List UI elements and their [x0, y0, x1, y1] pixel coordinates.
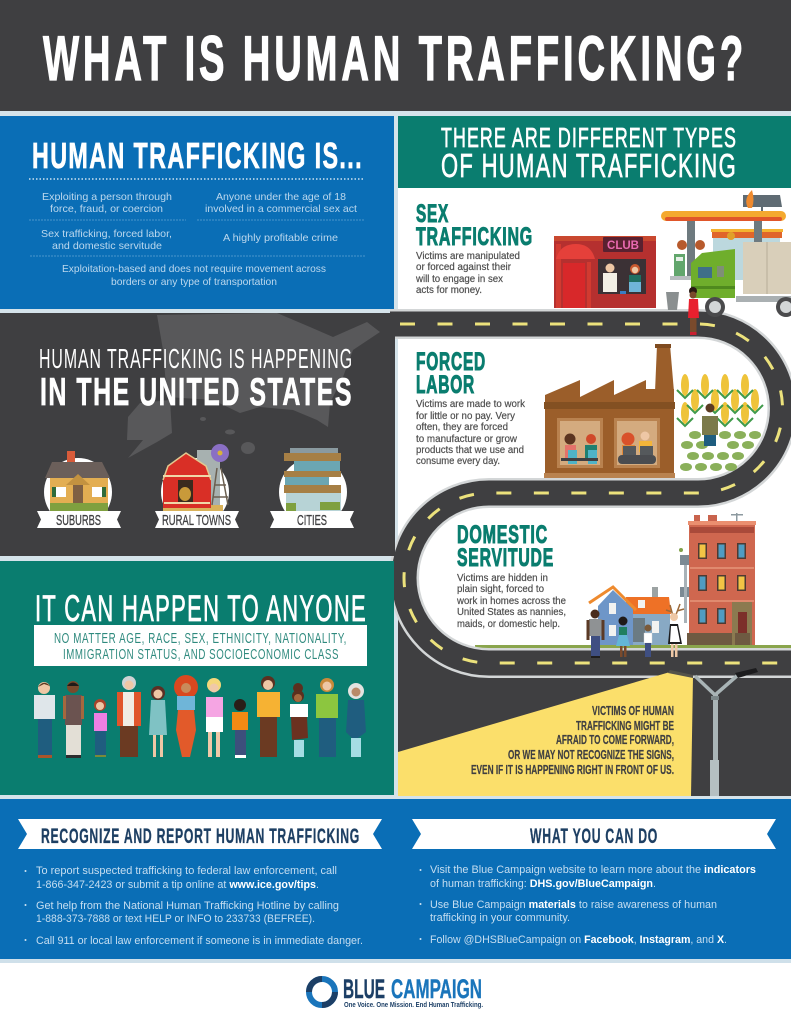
person 10: [290, 683, 308, 757]
workers at sewing tables: [561, 434, 598, 464]
list: report steps: [24, 865, 363, 947]
callout: yellow light beam: TRAFFICKING MIGHT BE: [576, 719, 674, 733]
section: sex trafficking text: acts for money.: [416, 285, 482, 296]
icon: blue house: [589, 587, 671, 645]
label: rural towns: RURAL TOWNS: [162, 512, 231, 529]
section: domestic servitude text: Victims are hidden in: [457, 573, 548, 584]
label: rural towns: [155, 511, 239, 529]
icon: rural barn: [161, 444, 229, 526]
label: cities: [270, 511, 354, 529]
section: forced labor text: consume every day.: [416, 456, 500, 467]
heading: HUMAN TRAFFICKING IS HAPPENING: [39, 343, 353, 374]
icon: street lamp: [695, 668, 758, 796]
subheading box: [34, 625, 367, 666]
person 8: [232, 699, 248, 758]
title band: [0, 0, 791, 111]
person 9: [257, 676, 280, 757]
person 4: [117, 676, 141, 757]
section: domestic servitude text: United States as nannies,: [457, 607, 566, 618]
icon: suburbs house: [44, 451, 112, 526]
person 1: [34, 682, 55, 758]
list: what you can do: of human trafficking: DHS.gov/BlueCampaign.: [430, 878, 656, 890]
list: what you can do: Follow @DHSBlueCampaign on Facebook, Instagram, and X.: [430, 934, 727, 946]
road: [390, 324, 791, 663]
icon: trash bin: [666, 292, 679, 310]
person 3: [94, 699, 107, 757]
man in grey shirt: [586, 610, 604, 658]
section: sex trafficking text: [415, 200, 533, 296]
list: report steps: Call 911 or local law enforcement if someone is in immediate danger.: [36, 935, 363, 947]
list: report steps: 1-888-373-7888 or text HELP or INFO to 233733 (BEFREE).: [36, 913, 315, 925]
icon: logo ring: [309, 979, 335, 1005]
panel: bottom blue action band: [0, 799, 791, 963]
map silhouette: [127, 313, 380, 458]
logo: blue campaign: BLUE: [343, 974, 385, 1004]
section: forced labor text: often, they are forced: [416, 422, 508, 433]
person 5: [149, 686, 167, 757]
ribbon: recognize and report: RECOGNIZE AND REPORT HUMAN TRAFFICKING: [41, 825, 360, 848]
heading: IN THE UNITED STATES: [40, 371, 353, 414]
callout: yellow light beam: EVEN IF IT IS HAPPENING RIGHT IN FRONT OF US.: [471, 763, 674, 777]
ribbon: what you can do: [412, 819, 776, 849]
ribbon: recognize and report: [18, 819, 382, 849]
definition list: and domestic servitude: [52, 240, 162, 252]
definition list: [41, 191, 357, 288]
callout: yellow light beam: VICTIMS OF HUMAN: [592, 704, 674, 718]
icon: brick apartment building: [679, 513, 756, 645]
section: domestic servitude text: plain sight, forced to: [457, 584, 544, 595]
person 7: [206, 678, 223, 757]
panel: it can happen to anyone: [0, 561, 394, 795]
ribbon: what you can do: WHAT YOU CAN DO: [530, 825, 658, 848]
list: report steps: 1-866-347-2423 or submit a tip online at www.ice.gov/tips.: [36, 879, 319, 891]
people group: family on the road: [586, 604, 684, 658]
definition list: Anyone under the age of 18: [216, 191, 346, 203]
section: sex trafficking text: Victims are manipulated: [416, 251, 520, 262]
panel: human trafficking is: [0, 116, 394, 309]
section: domestic servitude text: SERVITUDE: [457, 544, 554, 572]
logo: blue campaign: CAMPAIGN: [391, 974, 482, 1004]
section: domestic servitude text: maids, or domestic help.: [457, 619, 560, 630]
label: suburbs: [37, 511, 121, 529]
list: what you can do: Use Blue Campaign materials to raise awareness of human: [430, 899, 717, 911]
section: forced labor text: [416, 348, 526, 467]
definition list: involved in a commercial sex act: [205, 203, 357, 215]
boy in white shirt: [644, 624, 652, 657]
panel: happening in the united states: [0, 313, 395, 556]
definition list: Exploitation-based and does not require movement across: [62, 263, 326, 275]
callout: yellow light beam: OR WE MAY NOT RECOGNIZE THE SIGNS,: [508, 748, 674, 762]
logo: blue campaign: One Voice. One Mission. End Human Trafficking.: [344, 1002, 483, 1009]
people row: [34, 675, 366, 758]
section: domestic servitude text: [456, 521, 566, 630]
heading: IT CAN HAPPEN TO ANYONE: [35, 588, 367, 629]
section: forced labor text: products that we use and: [416, 445, 524, 456]
subheading box: NO MATTER AGE, RACE, SEX, ETHNICITY, NATIONALITY,: [54, 630, 347, 647]
section: sex trafficking text: TRAFFICKING: [416, 223, 533, 251]
person 2: [63, 681, 84, 758]
section: sex trafficking text: will to engage in sex: [415, 274, 503, 285]
section: forced labor text: for little or no pay. Very: [416, 411, 515, 422]
grass strip: [475, 645, 791, 648]
icon: club building: CLUB: [607, 240, 639, 252]
heading: [39, 343, 353, 414]
icon: woman in red dress: [688, 287, 699, 335]
icon: green truck: [691, 242, 791, 317]
list: what you can do: trafficking in your community.: [430, 912, 570, 924]
list: what you can do: [420, 864, 756, 946]
definition list: Exploiting a person through: [42, 191, 172, 203]
definition list: borders or any type of transportation: [111, 276, 277, 288]
section: sex trafficking text: SEX: [416, 200, 449, 228]
definition list: force, fraud, or coercion: [50, 203, 163, 215]
section: domestic servitude text: DOMESTIC: [457, 521, 548, 549]
section: sex trafficking text: or forced against their: [416, 262, 512, 273]
panel: types of trafficking heading: [398, 116, 791, 188]
workers at conveyor: [618, 432, 656, 464]
icon: corn field and farmer: [677, 374, 763, 471]
list: report steps: Get help from the National Human Trafficking Hotline by calling: [36, 900, 339, 912]
footer background: [0, 963, 791, 1024]
icon: club building: [554, 236, 656, 308]
list: what you can do: Visit the Blue Campaign website to learn more about the indicators: [430, 864, 756, 876]
maid with antlers tree behind: [666, 604, 684, 657]
logo: blue campaign: [309, 974, 483, 1009]
person 12: [346, 683, 366, 757]
person 6: [174, 675, 198, 757]
definition list: A highly profitable crime: [223, 232, 338, 244]
person 11: [316, 678, 338, 757]
section: forced labor text: to manufacture or grow: [416, 434, 518, 445]
section: forced labor text: LABOR: [416, 371, 475, 399]
callout: yellow light beam: [398, 670, 693, 796]
panel: right road background: [390, 188, 791, 796]
woman in teal dress: [616, 616, 630, 657]
list: report steps: To report suspected trafficking to federal law enforcement, call: [36, 865, 337, 877]
section: forced labor text: Victims are made to work: [416, 399, 526, 410]
icon: factory: [544, 344, 675, 478]
heading: human trafficking is: HUMAN TRAFFICKING IS...: [32, 135, 363, 176]
label: cities: CITIES: [297, 512, 327, 529]
callout: yellow light beam: AFRAID TO COME FORWARD,: [556, 733, 674, 747]
icon: city building: [279, 448, 347, 526]
section: forced labor text: FORCED: [416, 348, 486, 376]
icon: gas station: [661, 190, 786, 280]
subheading box: IMMIGRATION STATUS, AND SOCIOECONOMIC CLASS: [63, 646, 339, 663]
definition list: Sex trafficking, forced labor,: [41, 228, 172, 240]
section: domestic servitude text: work in homes across the: [456, 596, 566, 607]
label: suburbs: SUBURBS: [56, 512, 101, 529]
